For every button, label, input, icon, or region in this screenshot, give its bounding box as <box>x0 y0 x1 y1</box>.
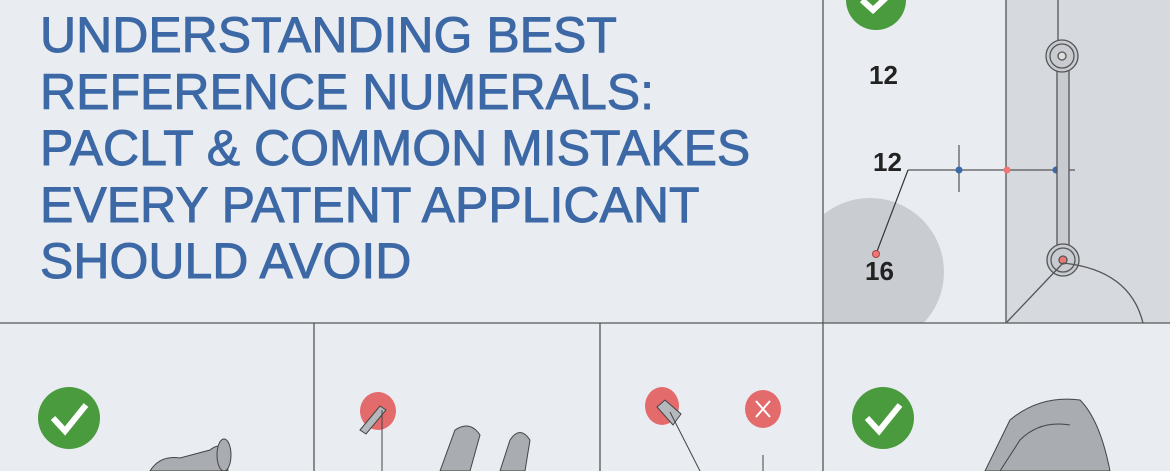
illustration: part 4 <box>985 399 1110 471</box>
mechanism drawing <box>1007 0 1143 323</box>
title: REFERENCE NUMERALS: <box>40 64 654 120</box>
title: EVERY PATENT APPLICANT <box>40 176 700 232</box>
title: SHOULD AVOID <box>40 233 411 289</box>
panel: right grey strip <box>1006 0 1170 323</box>
icon: red marker 3 <box>645 387 700 471</box>
label 12 with leader: 12 <box>873 147 902 177</box>
grey circle decoration <box>824 198 944 322</box>
title: UNDERSTANDING BEST <box>40 7 617 63</box>
label 16: 16 <box>865 256 894 286</box>
label 12 with leader <box>872 145 1075 258</box>
icon: check bottom right <box>852 387 914 449</box>
icon: check bottom left <box>38 387 100 449</box>
illustration: part 2 <box>440 426 530 471</box>
illustration: part 1 <box>150 439 231 471</box>
icon: top check <box>846 0 906 30</box>
title <box>40 7 750 289</box>
label 12 top: 12 <box>869 60 898 90</box>
title: PACLT & COMMON MISTAKES <box>40 120 750 176</box>
icon: red X <box>745 390 781 471</box>
icon: red marker 2 <box>360 392 396 471</box>
